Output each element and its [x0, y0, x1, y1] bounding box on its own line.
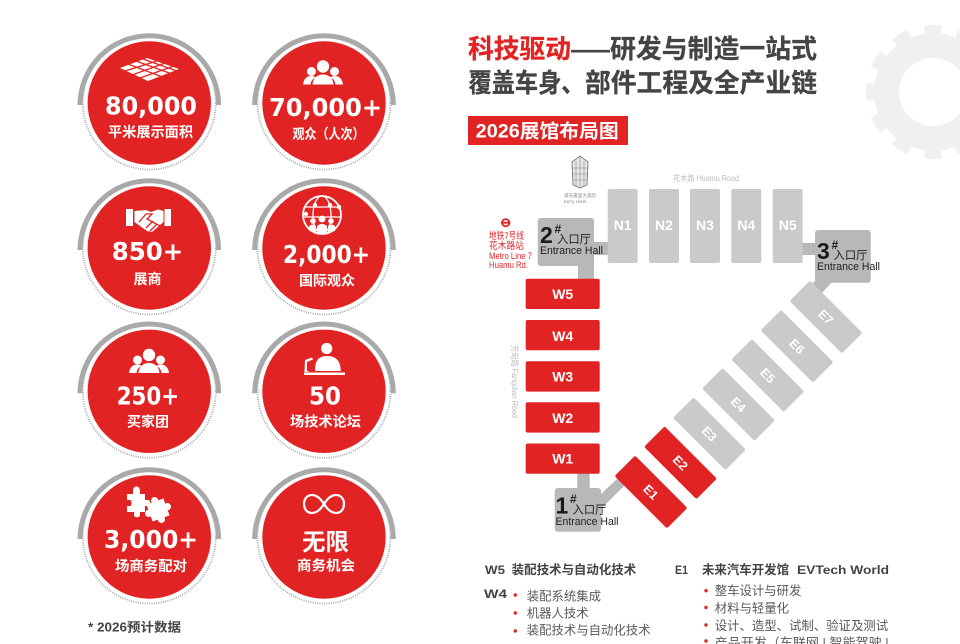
stat: 2,000+ international visitors	[255, 181, 393, 314]
hotel landmark: Kerry Hotel	[564, 199, 586, 204]
stat: 850+ exhibitors: 展商	[134, 271, 162, 287]
entrance hall 1: 入口厅	[572, 504, 606, 516]
north halls: N1	[614, 217, 632, 233]
title: 部件工程及全产业链	[585, 68, 817, 98]
section badge: 2026展馆布局图	[476, 119, 619, 142]
east halls: E4	[728, 394, 749, 415]
north halls: N2	[655, 217, 673, 233]
title: ——	[571, 34, 610, 64]
legend: west halls: 装配技术与自动化技术	[527, 624, 651, 638]
icon: speaker at podium	[304, 343, 345, 375]
stat: unlimited business opportunities	[255, 470, 393, 604]
entrance hall 1: Entrance Hall	[556, 516, 618, 528]
icon: floor grid	[120, 58, 179, 81]
road label: Huamu Road: 花木路 Huamu Road	[673, 173, 739, 183]
stat: 250+ buyer groups: 买家团	[127, 414, 169, 430]
stat: 50 technical forums: 50	[309, 381, 341, 410]
footnote: * 2026预计数据	[88, 620, 181, 634]
legend: east hall E1: EVTech World	[797, 563, 889, 577]
title	[468, 34, 817, 98]
legend: east hall E1: 设计、造型、试制、验证及测试	[715, 618, 888, 633]
north halls: N5	[779, 217, 797, 233]
decorative gear	[871, 30, 960, 154]
title: 研发与制造一站式	[610, 34, 817, 64]
east halls: E6	[786, 336, 807, 357]
title: 覆盖车身、	[468, 68, 584, 98]
icon: audience	[303, 60, 343, 84]
legend: west halls: W4	[484, 587, 507, 601]
entrance hall 2: 2	[540, 222, 553, 248]
entrance hall 3: 入口厅	[834, 249, 868, 262]
stat: 80,000 exhibition area: 80,000	[105, 91, 197, 120]
stat: 3,000+ business matchings	[80, 470, 219, 604]
legend: west halls: W5	[485, 563, 505, 577]
north halls	[608, 189, 803, 263]
north halls: N3	[696, 217, 714, 233]
entrance hall 2: Entrance Hall	[540, 245, 603, 257]
entrance hall 1: #	[570, 492, 577, 506]
legend: east hall E1: E1	[675, 563, 688, 577]
icon: puzzle pieces	[127, 486, 175, 527]
stat: 70,000+ visitors	[255, 36, 393, 170]
icon: handshake	[126, 209, 171, 232]
north halls: N4	[737, 217, 755, 233]
legend: east hall E1: 整车设计与研发	[715, 583, 801, 598]
stat: 850+ exhibitors: 850+	[112, 237, 183, 266]
stat: 80,000 exhibition area	[80, 36, 219, 170]
west halls: W2	[552, 410, 573, 426]
stat: unlimited business opportunities: 商务机会	[297, 558, 355, 574]
stat: 70,000+ visitors: 70,000+	[269, 93, 382, 122]
icon: infinity	[304, 495, 344, 513]
stat: 250+ buyer groups	[80, 324, 219, 458]
icon: buyers group	[129, 349, 169, 373]
east halls: E1	[640, 482, 661, 503]
floor plan map	[489, 156, 880, 532]
entrance hall 1	[555, 488, 618, 532]
stat: 3,000+ business matchings: 场商务配对	[115, 558, 187, 574]
east halls: E7	[815, 307, 836, 328]
hotel landmark	[564, 156, 597, 204]
title: 科技驱动	[468, 34, 571, 64]
section badge	[468, 116, 628, 145]
stat: 2,000+ international visitors: 2,000+	[283, 240, 370, 269]
entrance hall 3	[815, 230, 880, 283]
entrance hall 3: 3	[817, 238, 830, 264]
connectors	[577, 242, 833, 510]
stat: 50 technical forums: 场技术论坛	[290, 414, 361, 430]
legend: west halls: 机器人技术	[527, 606, 589, 620]
east halls	[615, 281, 862, 528]
entrance hall 2: 入口厅	[557, 233, 591, 246]
west halls: W4	[552, 328, 573, 344]
stat: 70,000+ visitors: 观众（人次）	[292, 126, 364, 142]
legend: east hall E1: 未来汽车开发馆	[702, 562, 789, 577]
stat: 850+ exhibitors	[80, 181, 219, 314]
legend: west halls	[484, 562, 651, 638]
entrance hall 3: Entrance Hall	[817, 261, 880, 273]
west halls: W3	[552, 368, 573, 384]
east halls: E5	[757, 365, 778, 386]
east halls: E2	[670, 453, 691, 473]
icon: globe and people	[303, 196, 341, 234]
stat: 2,000+ international visitors: 国际观众	[299, 273, 355, 289]
west halls: W1	[552, 450, 573, 466]
metro station label: 花木路站	[489, 240, 524, 252]
legend: west halls: 装配系统集成	[527, 588, 601, 604]
legend: east hall E1	[675, 562, 889, 644]
stat: 3,000+ business matchings: 3,000+	[104, 525, 198, 554]
entrance hall 3: #	[832, 238, 838, 252]
west halls	[526, 279, 600, 474]
stat: 80,000 exhibition area: 平米展示面积	[108, 124, 193, 140]
metro station label: 地铁7号线	[489, 230, 524, 242]
east halls: E3	[699, 424, 720, 444]
metro station label: Metro Line 7	[489, 251, 532, 262]
legend: west halls: 装配技术与自动化技术	[512, 562, 637, 577]
entrance hall 1: 1	[556, 492, 568, 518]
metro station label	[489, 219, 532, 271]
entrance hall 2	[538, 218, 603, 266]
metro station label: Huamu Rd.	[489, 260, 528, 271]
west halls: W5	[552, 286, 573, 302]
road label: Fangdian Road: 芳甸路 Fangdian Road	[510, 345, 520, 418]
hotel landmark: 浦东嘉里大酒店	[564, 192, 597, 199]
entrance hall 2: #	[554, 222, 562, 236]
stat: unlimited business opportunities: 无限	[302, 529, 349, 555]
legend: east hall E1: 材料与轻量化	[715, 602, 789, 616]
stat: 50 technical forums	[255, 324, 393, 458]
stat: 250+ buyer groups: 250+	[117, 381, 179, 410]
